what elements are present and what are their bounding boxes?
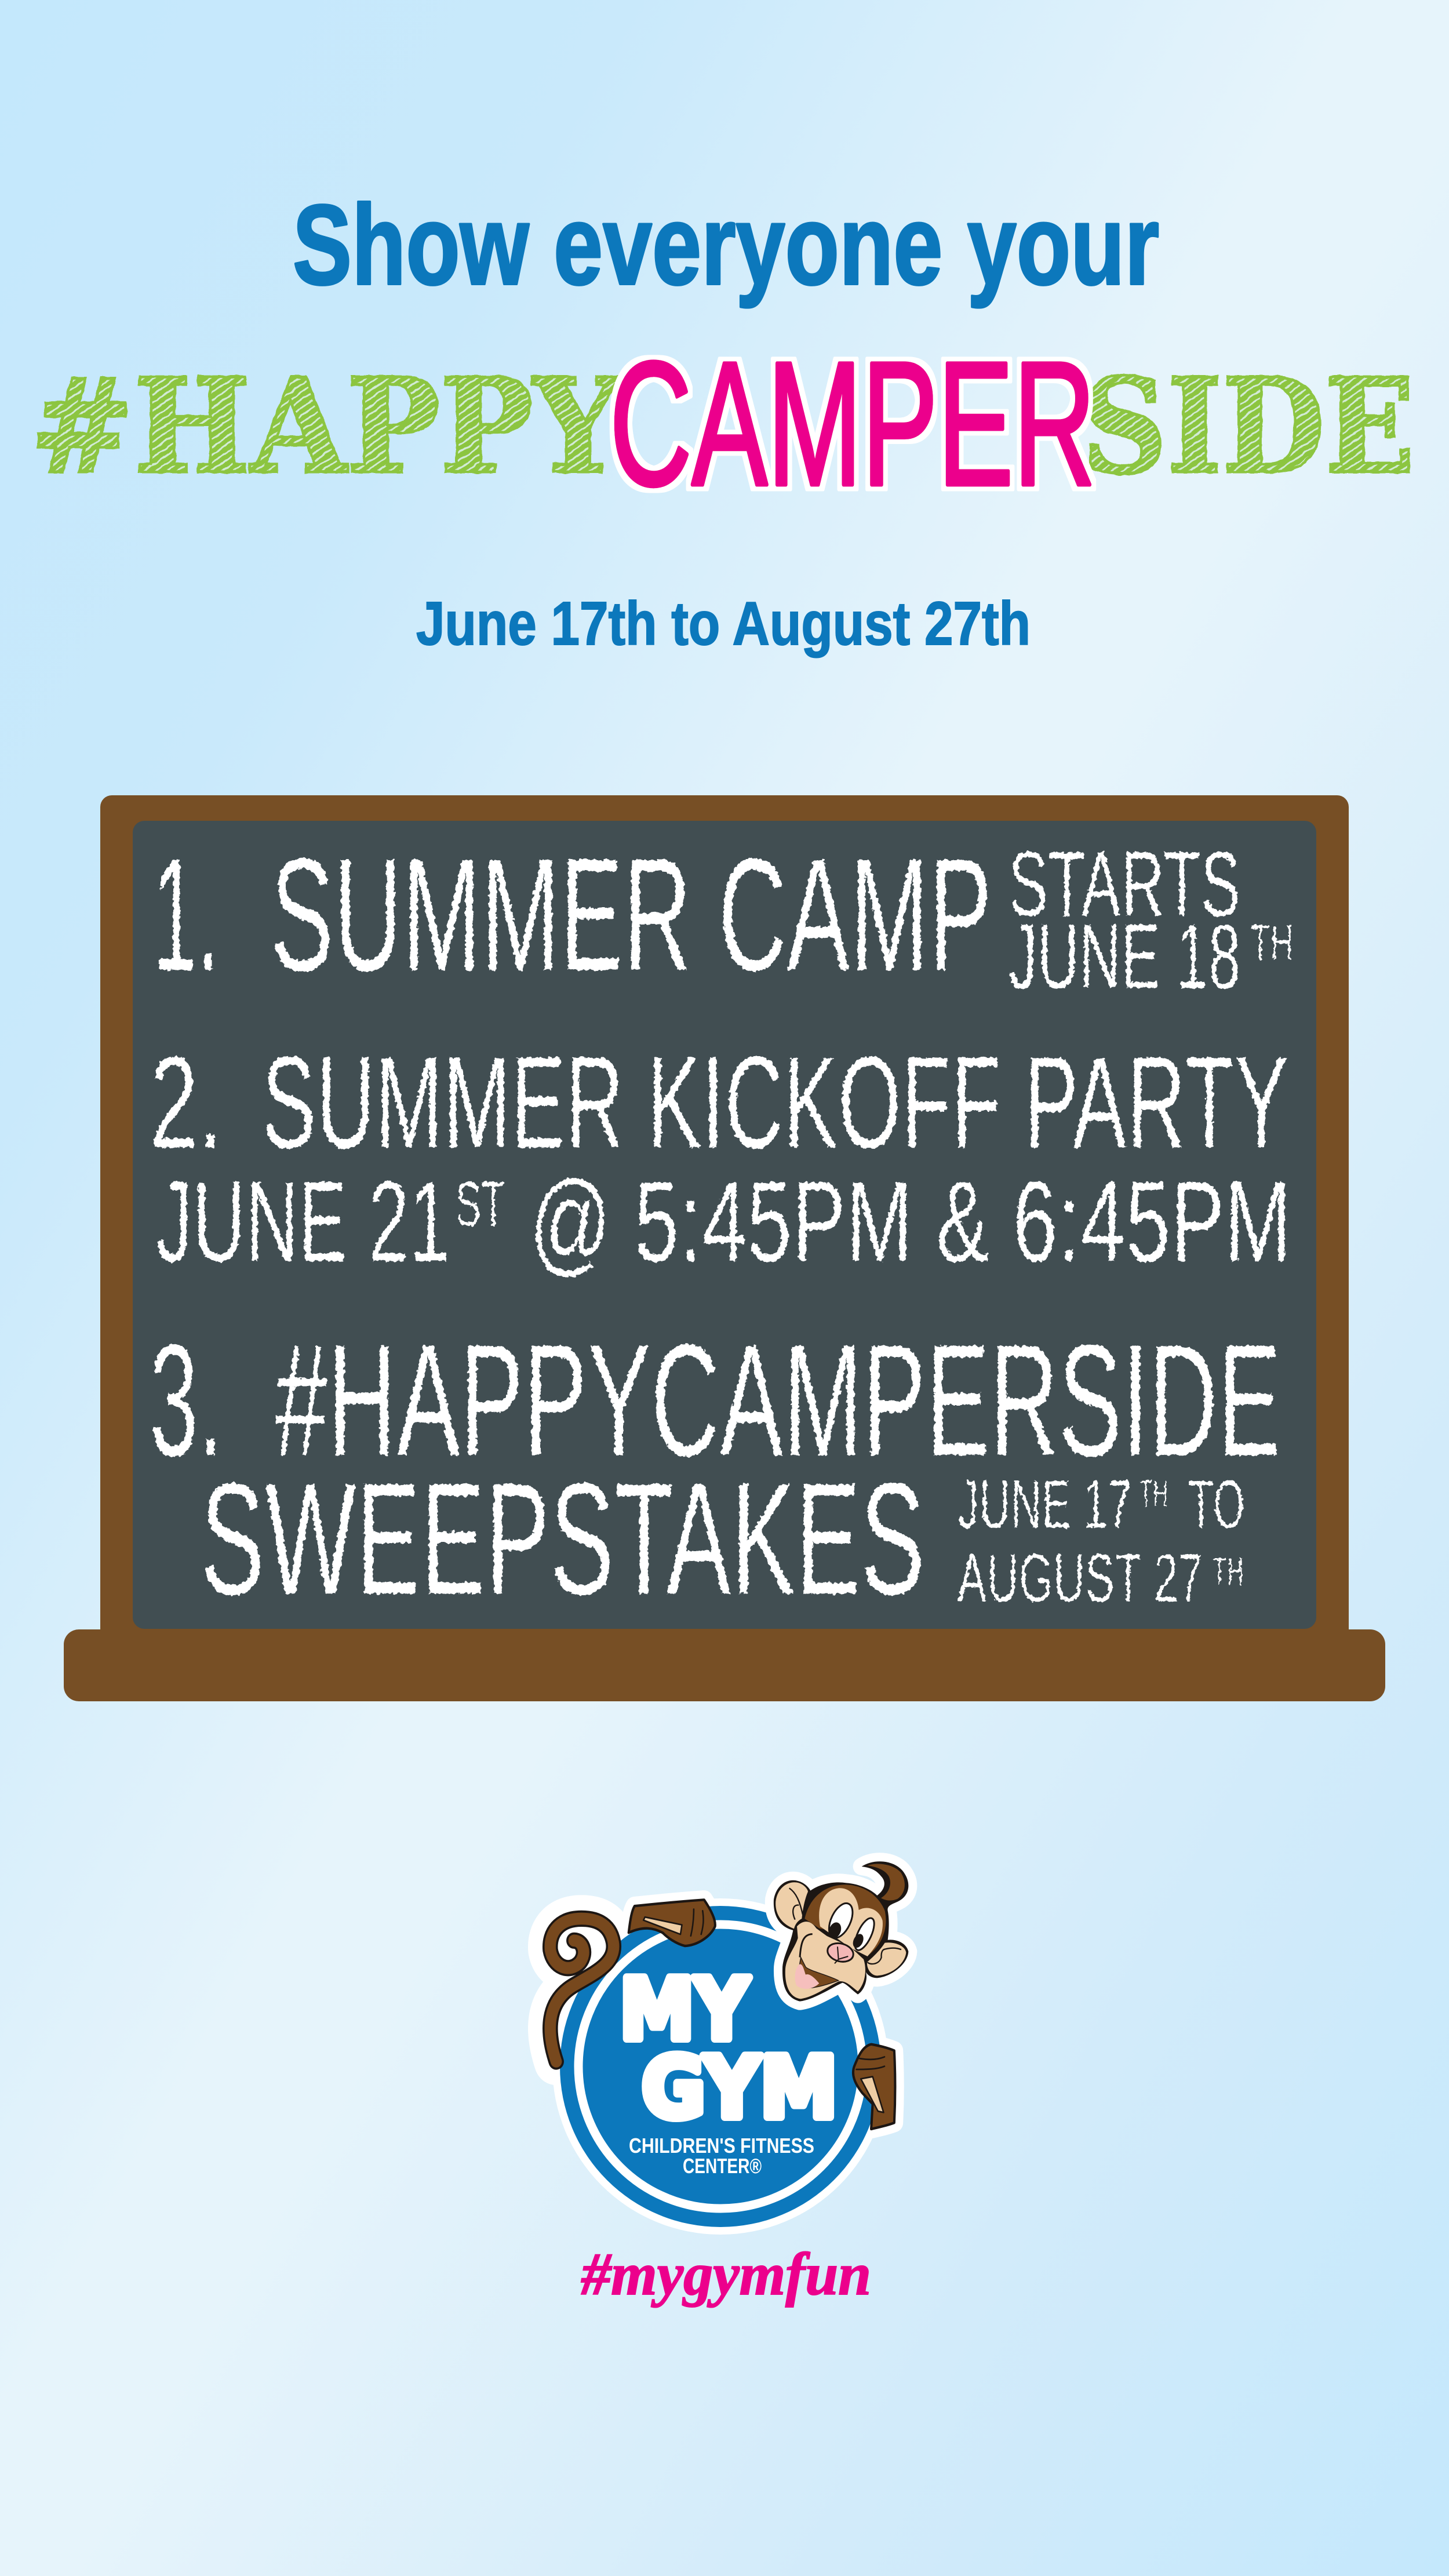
sweepstakes: SWEEPSTAKES <box>201 1450 925 1628</box>
muzzle <box>785 1922 865 1999</box>
right eye <box>851 1916 878 1953</box>
st superscript: ST <box>456 1169 505 1240</box>
heading: Show everyone your: Show everyone your <box>293 181 1159 308</box>
item 1 <box>153 824 1294 1008</box>
left ear <box>776 1882 808 1929</box>
sticker outline <box>774 1861 908 2002</box>
pink word: CAMPER: CAMPER <box>610 326 1095 522</box>
hashtag title <box>30 326 1415 522</box>
hashtag: mygymfun: #mygymfun <box>581 2241 871 2308</box>
blue badge <box>552 1898 889 2235</box>
item 1: 1. <box>153 824 220 1005</box>
right knuckles <box>857 2057 884 2069</box>
tail <box>550 1919 614 2061</box>
top hand <box>629 1900 715 1946</box>
june 21: JUNE 21 <box>156 1158 450 1286</box>
hair <box>804 1884 886 1955</box>
left pupil <box>827 1920 843 1940</box>
nose <box>825 1941 855 1964</box>
right finger <box>861 2077 883 2112</box>
wooden frame <box>100 795 1349 1653</box>
green word: #HAPPY: #HAPPY <box>30 350 622 503</box>
monkey tail and hands <box>550 1900 895 2129</box>
to: TO <box>1189 1466 1245 1543</box>
th superscript: TH <box>1213 1549 1244 1594</box>
th superscript: TH <box>1139 1472 1168 1516</box>
logo wordmark <box>620 1961 838 2137</box>
smile line <box>800 1934 813 1958</box>
right ear <box>867 1942 906 1975</box>
GYM: GYM <box>642 2039 838 2137</box>
logo <box>550 1861 908 2235</box>
tongue <box>795 1964 819 1989</box>
head outline <box>774 1861 908 2002</box>
top knuckles <box>691 1909 704 1936</box>
june 17: JUNE 17 <box>957 1466 1132 1543</box>
nose crease <box>835 1946 848 1963</box>
number 3: 3. <box>150 1311 223 1490</box>
right ear lines <box>868 1948 901 1964</box>
number 2: 2. <box>150 1029 223 1176</box>
mouth <box>797 1958 839 1988</box>
date line: June 17th to August 27th <box>416 590 1031 658</box>
top finger <box>643 1917 682 1934</box>
right hand <box>853 2044 895 2129</box>
chalkboard <box>64 795 1385 1701</box>
children's fitness: CHILDREN'S FITNESS <box>629 2134 814 2157</box>
monkey head <box>774 1861 908 2002</box>
starts: STARTS <box>1009 832 1241 936</box>
center: CENTER® <box>683 2154 762 2178</box>
left eye <box>824 1900 857 1941</box>
item 2 <box>150 1029 1292 1286</box>
wooden shelf <box>64 1629 1385 1701</box>
face <box>819 1888 883 1956</box>
left ear lines <box>789 1888 803 1920</box>
MY: MY <box>620 1961 750 2059</box>
slate panel <box>133 821 1316 1629</box>
th superscript: TH <box>1251 914 1294 971</box>
june 18: JUNE 18 <box>1009 904 1241 1008</box>
logo tagline <box>629 2134 814 2178</box>
august 27: AUGUST 27 <box>957 1540 1203 1617</box>
topknot <box>868 1864 905 1901</box>
right pupil <box>851 1932 865 1949</box>
sticker outline: tail and hands <box>550 1900 895 2129</box>
green word: SIDE: SIDE <box>1082 350 1415 503</box>
item 3 <box>150 1311 1281 1628</box>
